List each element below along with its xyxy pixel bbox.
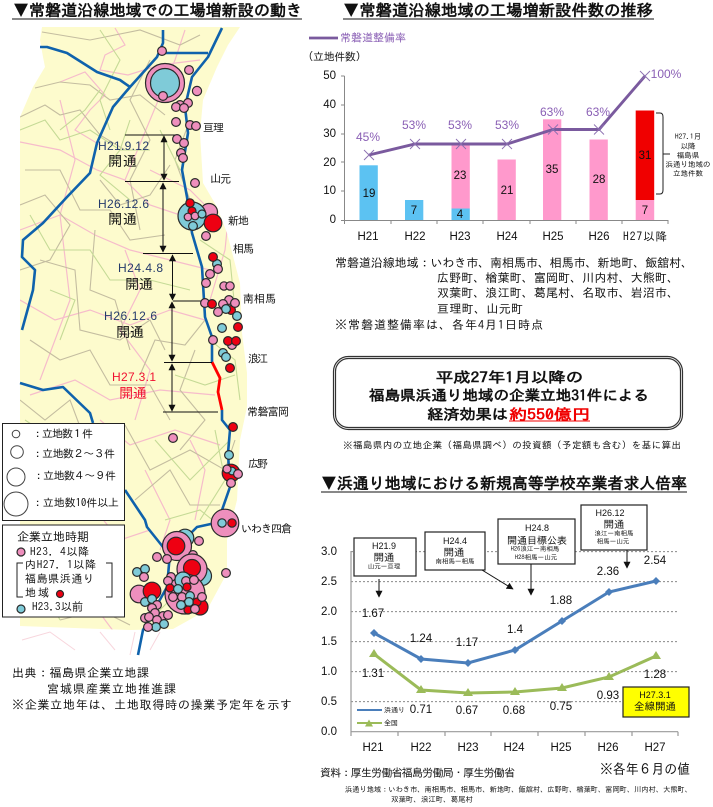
chart note: ※各年６月の値 <box>600 762 690 776</box>
y axis labels: 10 <box>323 185 336 197</box>
map source note: 出典：福島県企業立地課 <box>12 666 149 679</box>
expressway network <box>20 28 230 655</box>
legend: siting period: H23．4以降 <box>30 546 89 558</box>
data labels: national: 0.68 <box>503 705 525 717</box>
callout: H24.4 opening: 南相馬ー相馬 <box>436 558 474 564</box>
opening date labels: 開通 <box>125 277 153 291</box>
axis title: (立地件数) <box>308 52 361 62</box>
x axis labels: H21 <box>357 231 379 243</box>
Hamadori area list: 浜通り地域：いわき市、南相馬市、相馬市、新地町、飯舘村、広野町、楢葉町、富岡町、川内村、大熊町、 <box>345 785 692 794</box>
bar values: 7 <box>411 205 417 217</box>
completion rate line <box>364 71 650 160</box>
bracket annotation: 立地件数 <box>673 169 704 177</box>
x axis labels: H25 <box>550 742 572 754</box>
line: Hamadori <box>370 577 660 667</box>
opening date labels: H24.4.8 <box>118 261 163 275</box>
bars <box>360 110 654 220</box>
line: national <box>369 649 661 696</box>
x axis labels: H24 <box>503 742 525 754</box>
bar values: 31 <box>639 150 651 162</box>
place names: 新地 <box>228 216 249 226</box>
x axis labels: H23 <box>449 231 471 243</box>
place names: 広野 <box>248 458 268 470</box>
opening date labels: 開通 <box>108 154 137 168</box>
completion rate labels: 53% <box>495 118 519 132</box>
data labels: Hamadori: 2.54 <box>644 555 667 567</box>
area list note: 双葉町、浪江町、葛尾村、名取市、岩沼市、 <box>437 287 679 299</box>
bar values: 23 <box>454 170 466 182</box>
data labels: Hamadori: 1.24 <box>410 633 433 645</box>
site bubbles north <box>146 47 202 187</box>
opening date labels: H21.9.12 <box>98 139 149 153</box>
legend: siting period: 福島県浜通り <box>25 572 94 584</box>
y axis labels: 3.0 <box>321 546 337 558</box>
callout: full opening: 全線開通 <box>634 701 676 712</box>
x axis labels: H27 <box>644 742 666 754</box>
map source note <box>12 666 292 711</box>
place names <box>203 122 292 534</box>
bar values: 4 <box>457 209 464 221</box>
opening date labels: 開通 <box>108 212 137 226</box>
bracket annotation: 以降 <box>680 142 696 150</box>
x axis labels: H26 <box>588 231 610 243</box>
data labels: national: 0.75 <box>550 701 572 713</box>
place names: 亘理 <box>203 122 224 134</box>
data labels: national: 0.93 <box>597 690 619 702</box>
legend: siting period <box>2 525 124 617</box>
completion rate labels: 100% <box>651 67 682 81</box>
area list note <box>335 256 693 331</box>
x axis labels: H22 <box>410 742 432 754</box>
axes <box>341 76 668 224</box>
legend: bubble size: ：立地数２～３件 <box>32 448 115 460</box>
data labels: Hamadori: 1.67 <box>362 608 384 620</box>
section boundaries and arrows <box>125 135 218 412</box>
place names: 相馬 <box>233 244 254 254</box>
completion rate labels <box>356 67 682 144</box>
Hamadori area list: 双葉町、浪江町、葛尾村 <box>391 795 473 804</box>
chart legend <box>357 706 405 726</box>
callout: full opening: H27.3.1 <box>639 690 671 700</box>
callout: H26.12 opening: 浪江ー南相馬 <box>594 530 634 536</box>
y axis labels <box>321 546 337 738</box>
data labels: national: 1.28 <box>644 669 666 681</box>
map source note: ※企業立地年は、土地取得時の操業予定年を示す <box>12 698 292 711</box>
callout: H24.4 opening: H24.4 <box>443 536 467 546</box>
place names: 山元 <box>210 174 231 184</box>
data labels: Hamadori <box>362 555 667 649</box>
completion rate labels: 45% <box>356 130 380 144</box>
x axis labels: H26 <box>597 742 619 754</box>
site bubbles Tomioka, Hirono and Iwaki Yotsukura <box>169 423 242 537</box>
chart legend: 浜通り <box>384 706 405 714</box>
bar values: 35 <box>546 164 558 176</box>
data labels: national <box>362 668 666 717</box>
site bubbles Minamisoma and Namie <box>201 296 242 372</box>
callout: H21.9 opening <box>354 538 416 576</box>
completion rate labels: 53% <box>402 118 426 132</box>
bar and line chart: siting counts and expressway completion <box>308 32 710 243</box>
callout: H26.12 opening: 相馬ー山元 <box>597 538 630 544</box>
callout footnote: ※福島県内の立地企業（福島県調べ）の投資額（予定額も含む）を基に算出 <box>343 440 681 450</box>
bracket annotation: H27.1月 <box>675 132 701 141</box>
bar values <box>363 150 651 221</box>
opening date labels <box>98 139 163 400</box>
data labels: national: 0.67 <box>456 705 478 717</box>
x axis labels: H22 <box>404 231 426 243</box>
opening date labels: 開通 <box>119 386 147 400</box>
line chart: job openings ratio <box>321 505 689 754</box>
y axis labels: 40 <box>323 99 336 111</box>
heading: job openings ratio: ▼浜通り地域における新規高等学校卒業者求人倍率 <box>321 475 687 491</box>
callout: economic effect: 経済効果は <box>427 406 508 422</box>
y axis labels: 0.0 <box>321 726 337 738</box>
legend: siting period: 企業立地時期 <box>17 531 89 543</box>
bar values: 19 <box>363 188 375 200</box>
x axis labels: H21 <box>362 742 384 754</box>
map source note: 宮城県産業立地推進課 <box>47 683 176 695</box>
bracket annotation: 浜通り地域の <box>666 160 710 169</box>
callout: economic effect: 約550億円 <box>509 406 590 422</box>
opening date labels: H27.3.1 <box>112 370 156 384</box>
x axis labels <box>362 742 666 754</box>
y axis labels: 50 <box>323 70 336 82</box>
chart legend <box>309 32 406 44</box>
y axis labels: 20 <box>323 157 336 169</box>
completion rate labels: 63% <box>586 105 610 119</box>
callout: economic effect: 平成27年1月以降の <box>436 370 583 384</box>
data labels: national: 0.71 <box>410 704 432 716</box>
opening date labels: H26.12.6 <box>104 309 157 323</box>
x axis labels: H27以降 <box>623 230 667 242</box>
legend: bubble size: ：立地数１件 <box>32 428 93 440</box>
area list note: ※常磐道整備率は、各年4月1日時点 <box>335 318 543 331</box>
data labels: Hamadori: 1.17 <box>456 637 478 649</box>
y axis labels: 2.0 <box>321 606 337 618</box>
chart legend: 常磐道整備率 <box>340 32 406 44</box>
area list note: 常磐道沿線地域：いわき市、南相馬市、相馬市、新地町、飯舘村、 <box>335 256 693 269</box>
arrow: H21.9 <box>378 579 380 597</box>
callout: H24.4 opening <box>425 532 485 570</box>
legend: bubble size <box>2 424 124 520</box>
y axis labels <box>323 70 336 226</box>
callout: H21.9 opening: 開通 <box>374 553 394 563</box>
data labels: Hamadori: 1.4 <box>507 624 524 636</box>
arrow: H24.8 <box>530 564 532 595</box>
y axis labels: 1.5 <box>321 636 337 648</box>
place names: 常磐富岡 <box>247 406 289 418</box>
x axis labels <box>357 230 667 243</box>
callout: H21.9 opening: H21.9 <box>372 541 396 551</box>
y axis labels: 30 <box>323 128 336 140</box>
callout: H21.9 opening: 山元ー亘理 <box>368 562 401 570</box>
bar values: 28 <box>593 174 605 186</box>
bracket annotation: 福島県 <box>677 151 700 159</box>
callout: H24.8 announcement: H28相馬ー山元 <box>515 554 558 560</box>
legend: siting period: H23.3以前 <box>32 600 83 612</box>
chart source: 資料：厚生労働省福島労働局・厚生労働省 <box>320 766 515 778</box>
data labels: Hamadori: 1.88 <box>550 595 572 607</box>
arrow: H26.12 <box>626 550 628 568</box>
callout: H26.12 opening: 開通 <box>604 520 624 530</box>
axes <box>351 551 678 736</box>
callout: H26.12 opening: H26.12 <box>595 508 625 518</box>
grid lines <box>351 552 678 702</box>
place names: 南相馬 <box>243 294 276 304</box>
bar values: 21 <box>501 185 513 197</box>
opening date labels: H26.12.6 <box>98 197 149 211</box>
pale roads outside the prefecture at the bottom <box>22 632 160 655</box>
callout: economic effect: 福島県浜通り地域の企業立地31件による <box>369 388 649 402</box>
site bubbles Shinchi and Soma <box>178 199 234 290</box>
bracket annotation <box>656 113 710 194</box>
heading: factory expansion map: ▼常磐道沿線地域での工場増新設の動き <box>13 1 302 18</box>
callout: H26.12 opening <box>581 505 647 550</box>
completion rate labels: 53% <box>448 118 472 132</box>
bar values: 7 <box>642 205 648 217</box>
callout: H24.8 announcement: H26浪江ー南相馬 <box>511 545 559 552</box>
callout: H24.8 announcement <box>498 519 575 564</box>
map of coastal area <box>20 27 292 655</box>
area list note: 亘理町、山元町 <box>437 303 523 315</box>
land mass <box>20 27 247 630</box>
place names: 浪江 <box>248 354 268 364</box>
y axis labels: 1.0 <box>321 666 337 678</box>
data labels: Hamadori: 2.36 <box>597 566 619 578</box>
data labels: national: 1.31 <box>362 668 384 680</box>
callout: H24.4 opening: 開通 <box>444 548 464 558</box>
Hamadori area list <box>345 785 692 804</box>
x axis labels: H25 <box>542 231 564 243</box>
y axis labels: 0.5 <box>321 696 337 708</box>
chart legend: 全国 <box>384 720 398 726</box>
callout: H24.8 announcement: H24.8 <box>525 523 549 533</box>
opening date labels: 開通 <box>116 325 144 339</box>
heading: factory count trend: ▼常磐道沿線地域の工場増新設件数の推移 <box>343 1 653 18</box>
callout: full opening <box>623 687 689 717</box>
road network <box>20 28 240 640</box>
x axis labels: H23 <box>457 742 479 754</box>
callout: economic effect <box>334 356 682 430</box>
completion rate labels: 63% <box>540 105 564 119</box>
arrow: H24.4 <box>482 570 513 589</box>
site bubbles Iwaki cluster <box>130 529 230 631</box>
legend: bubble size: ：立地数10件以上 <box>32 498 119 508</box>
legend: siting period: 地域 <box>25 588 49 598</box>
callout: H24.8 announcement: 開通目標公表 <box>507 536 567 546</box>
legend: siting period: 内H27．1以降 <box>25 558 96 570</box>
area list note: 広野町、楢葉町、富岡町、川内村、大熊町、 <box>437 271 679 284</box>
y axis labels: 0 <box>330 214 336 226</box>
place names: いわき四倉 <box>241 522 292 534</box>
y axis labels: 2.5 <box>321 576 337 588</box>
x axis labels: H24 <box>496 231 518 243</box>
legend: bubble size: ：立地数４～９件 <box>33 470 116 482</box>
